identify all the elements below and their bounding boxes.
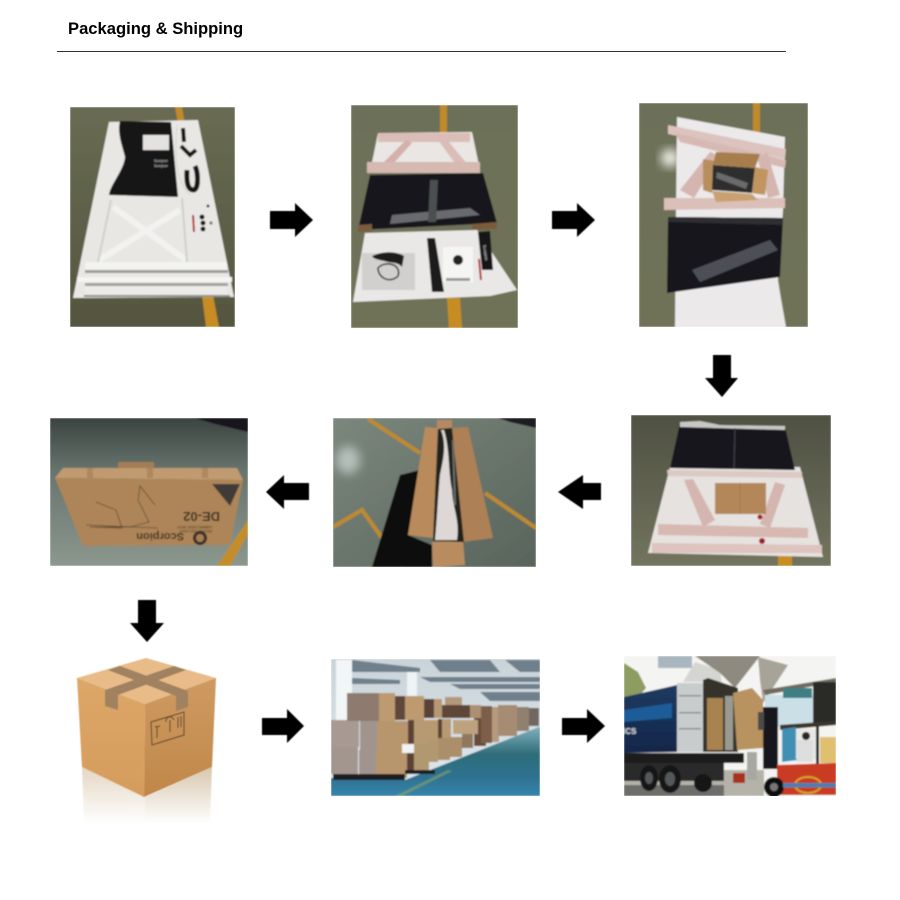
photo 7: warehouse with stacked cartons bbox=[331, 659, 540, 796]
photo 1: unpacked desk parts laid out on foam: Scorpion bbox=[154, 159, 168, 163]
photo 6: sealed printed carton DE-02: RACING LED LIGHT bbox=[178, 529, 212, 533]
illustration: sealed cardboard box with reflection bbox=[77, 658, 216, 824]
photo 6: sealed printed carton DE-02: GAMING DESK WITH bbox=[177, 525, 212, 529]
photo 1: unpacked desk parts laid out on foam: Scorpion bbox=[154, 164, 168, 168]
packing tape bbox=[105, 666, 188, 711]
ceiling beams bbox=[352, 660, 540, 701]
photo 8: forklift loading container truck: ICS bbox=[623, 727, 637, 736]
photo 6: sealed printed carton DE-02: Scorpion bbox=[136, 530, 184, 542]
photo 6: sealed printed carton DE-02: DE-02 bbox=[183, 509, 220, 524]
photo 2: frame wrapped, board in plastic, accessories bbox=[351, 105, 518, 328]
arrow: step 5 to 6 bbox=[266, 475, 309, 509]
arrow: box to warehouse bbox=[262, 709, 304, 743]
arrow: step 3 down to 4 bbox=[705, 355, 738, 397]
photo 4: board on top of frame with closed parts box bbox=[631, 415, 831, 566]
carton stacks bbox=[331, 693, 539, 778]
photo 3: parts box placed over wrapped frame bbox=[639, 103, 808, 327]
photo 6: sealed printed carton DE-02 bbox=[50, 418, 248, 566]
arrow: carton down to shipping box bbox=[130, 600, 164, 642]
arrow: step 2 to 3 bbox=[552, 203, 595, 237]
arrow: step 1 to 2 bbox=[270, 203, 313, 237]
photo 8: forklift loading container truck bbox=[623, 656, 836, 796]
photo 1: unpacked desk parts laid out on foam bbox=[70, 107, 235, 327]
arrow: step 4 to 5 bbox=[558, 475, 601, 509]
photo 5: parts packed in open carton bbox=[333, 418, 536, 567]
arrow: warehouse to truck bbox=[562, 709, 605, 743]
photo 2: frame wrapped, board in plastic, accessories: Scorpion bbox=[482, 244, 489, 261]
title: Packaging & Shipping bbox=[68, 19, 243, 38]
icon: handling symbols bbox=[151, 712, 184, 745]
